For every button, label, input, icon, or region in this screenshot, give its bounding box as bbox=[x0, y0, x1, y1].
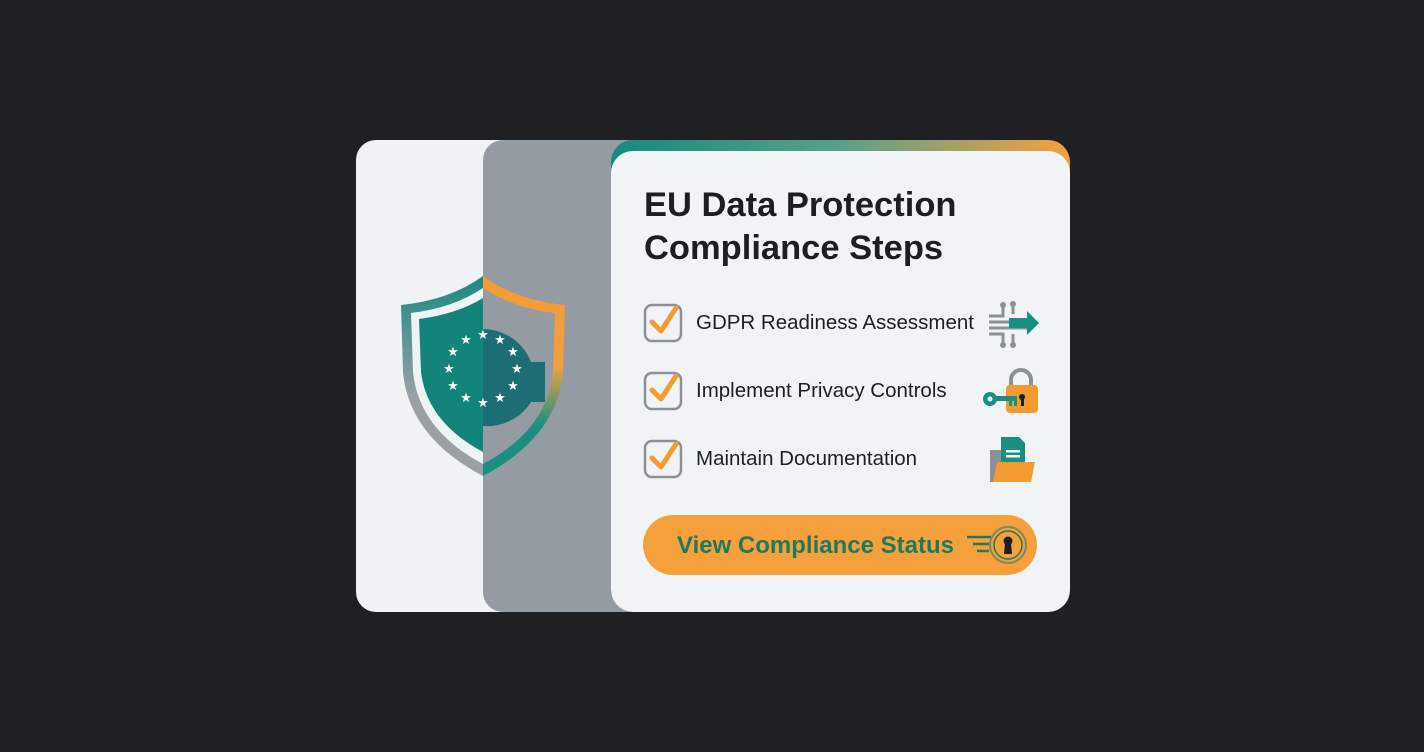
checklist item 1: GDPR Readiness Assessment bbox=[696, 311, 974, 334]
icon: EU shield: ★ bbox=[511, 361, 523, 376]
icon: EU shield: ★ bbox=[507, 344, 519, 359]
icon: key and padlock bbox=[983, 368, 1038, 413]
icon: EU shield: ★ bbox=[494, 390, 506, 405]
icon: EU shield: ★ bbox=[507, 378, 519, 393]
front card bbox=[611, 140, 1070, 612]
icon: EU shield: ★ bbox=[460, 332, 472, 347]
icon: EU shield bbox=[401, 276, 565, 476]
button: View Compliance Status: View Compliance Status bbox=[677, 532, 954, 559]
checklist item 2 bbox=[644, 368, 1038, 413]
icon: EU shield: ★ bbox=[477, 327, 489, 342]
title: EU Data Protection bbox=[644, 186, 956, 224]
icon: document folder bbox=[990, 437, 1035, 482]
middle gray panel bbox=[483, 140, 643, 612]
icon: EU shield: ★ bbox=[460, 390, 472, 405]
back card bbox=[356, 140, 656, 612]
icon: EU shield: ★ bbox=[443, 361, 455, 376]
icon: EU shield: ★ bbox=[447, 344, 459, 359]
icon: EU shield: ★ bbox=[447, 378, 459, 393]
checklist item 1 bbox=[644, 301, 1039, 348]
checklist item 2: Implement Privacy Controls bbox=[696, 379, 947, 402]
title bbox=[644, 186, 956, 267]
checklist item 3: Maintain Documentation bbox=[696, 447, 917, 470]
checklist item 3 bbox=[644, 437, 1035, 482]
icon: data flow arrow bbox=[989, 301, 1039, 348]
icon: EU shield: ★ bbox=[494, 332, 506, 347]
button: View Compliance Status bbox=[643, 515, 1037, 575]
title: Compliance Steps bbox=[644, 229, 943, 267]
icon: EU shield: ★ bbox=[477, 395, 489, 410]
icon: keyhole bbox=[967, 526, 1027, 564]
